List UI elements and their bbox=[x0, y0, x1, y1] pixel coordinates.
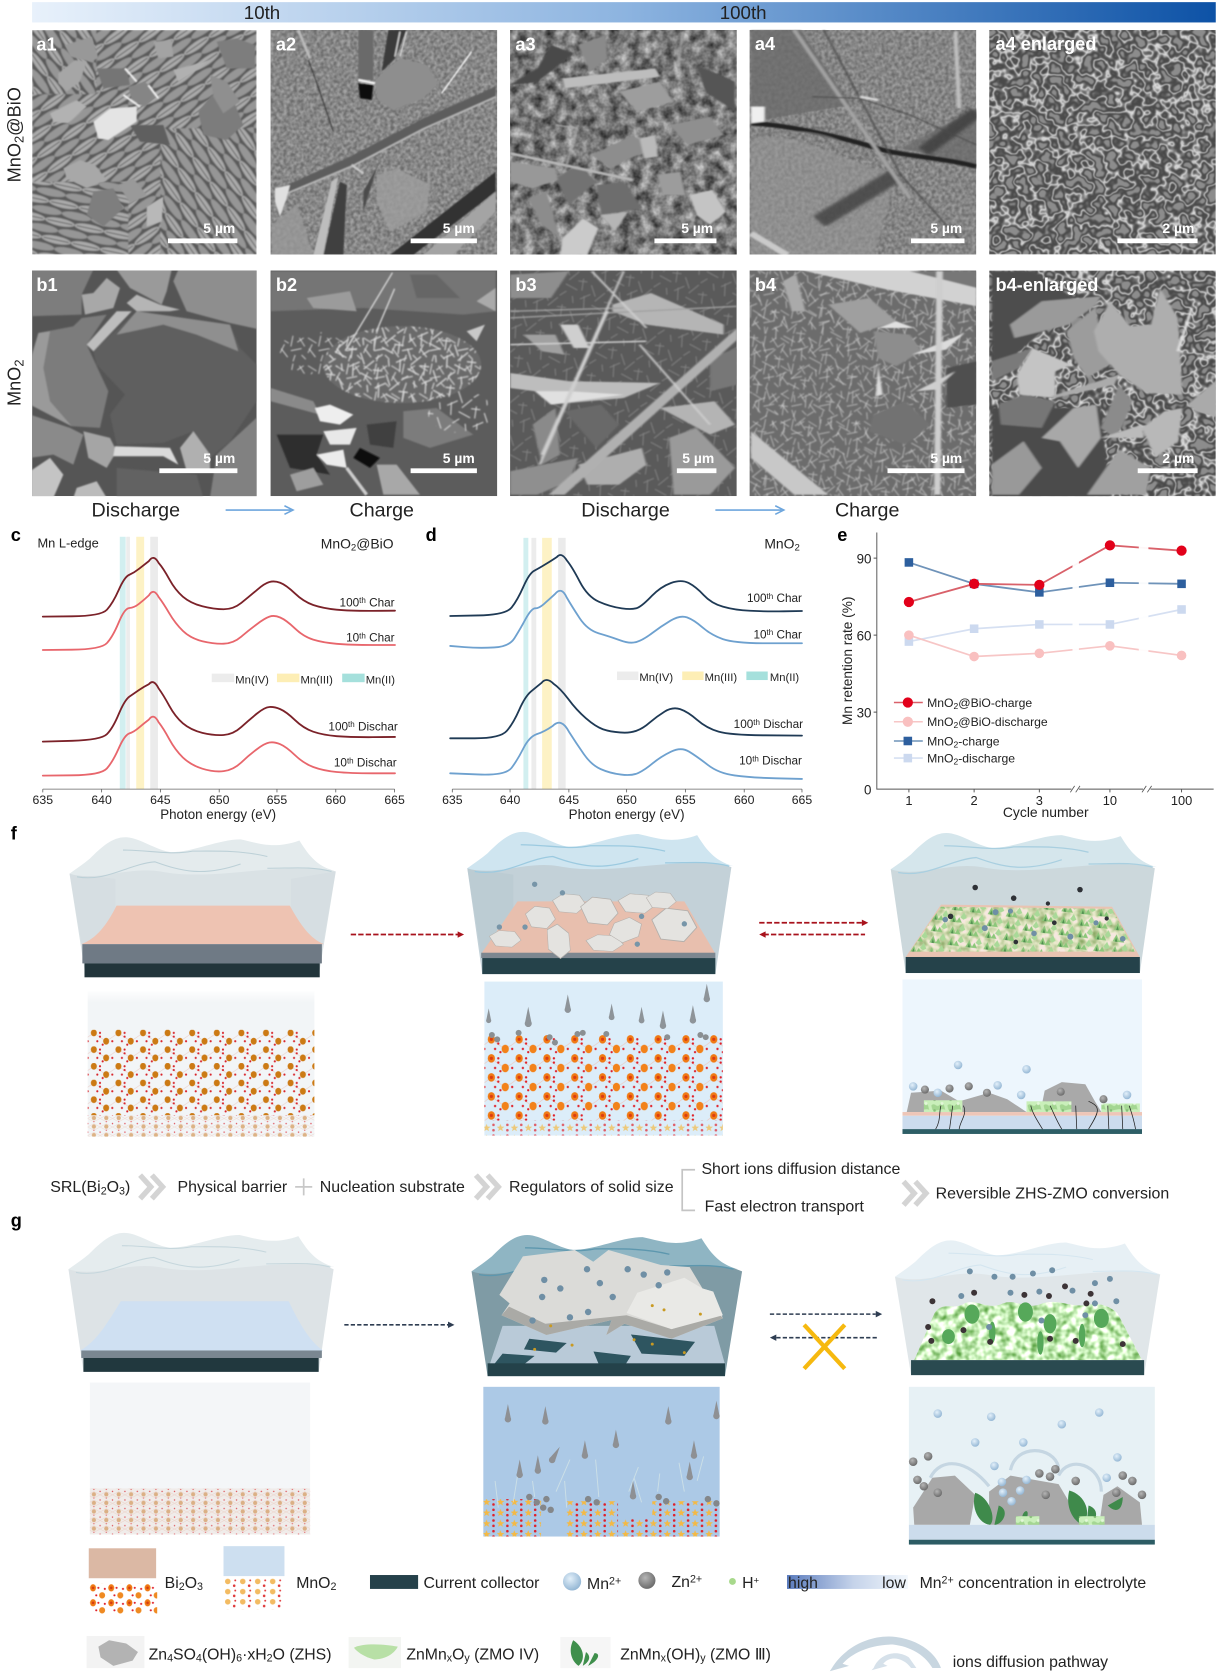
legend ZHS: O (ZHS) bbox=[273, 1646, 331, 1663]
curve labels d bbox=[734, 592, 803, 768]
legend Mn2+: Mn bbox=[587, 1576, 609, 1593]
caption: Charge 1: Charge bbox=[350, 499, 414, 521]
caption: Charge 2: Charge bbox=[835, 499, 899, 521]
x axis c: 660 bbox=[326, 793, 346, 807]
axes e: 30 bbox=[857, 705, 871, 720]
SEM panel b1 bbox=[30, 270, 260, 498]
scale bar a3: 5 µm bbox=[681, 220, 713, 236]
SEM panel a4 enlarged bbox=[989, 30, 1216, 254]
f1 cell: pristine Bi2O3 on current collector bbox=[70, 837, 336, 977]
x axis c: 650 bbox=[209, 793, 230, 807]
SEM panel b3 bbox=[510, 271, 737, 496]
x axis d: 635 bbox=[442, 793, 463, 807]
legend ZMO IV: x bbox=[447, 1653, 453, 1665]
panel letter c: c bbox=[11, 525, 21, 545]
curve labels d: 10 bbox=[739, 755, 752, 768]
panel letter g: g bbox=[11, 1210, 22, 1230]
x axis c bbox=[33, 789, 405, 822]
ions g3 bbox=[958, 1267, 1119, 1330]
legend ions diffusion pathway: ions diffusion pathway bbox=[953, 1654, 1108, 1671]
top cycle gradient bar bbox=[32, 2, 1216, 23]
legend c: Mn(II) bbox=[366, 674, 395, 686]
needle clusters b2 bbox=[278, 273, 492, 433]
curve 100th discharge d bbox=[450, 680, 802, 738]
legend ZMO III bbox=[560, 1637, 771, 1668]
arrow g1 to g2 bbox=[344, 1322, 454, 1328]
label a1: a1 bbox=[36, 34, 57, 54]
curve labels d: Char bbox=[773, 592, 802, 605]
label b3: b3 bbox=[515, 275, 537, 295]
text reversible: Reversible ZHS-ZMO conversion bbox=[936, 1186, 1169, 1203]
legend ZMO III: (ZMO Ⅲ) bbox=[706, 1646, 771, 1663]
legend ZHS: Zn bbox=[149, 1646, 167, 1663]
row label: MnO2@BiO: 2 bbox=[12, 136, 27, 143]
legend e: MnO bbox=[927, 751, 953, 765]
curve labels c: th bbox=[359, 596, 366, 605]
legend concentration gradient bbox=[787, 1575, 1146, 1592]
curve labels d: th bbox=[753, 718, 760, 727]
legend row 1 bbox=[89, 1546, 1146, 1614]
axes e: 3 bbox=[1036, 793, 1043, 808]
scale bar a2 bbox=[410, 224, 477, 244]
f3 section: ZHS and ZMO with diffusion bbox=[902, 979, 1142, 1134]
curve labels c bbox=[328, 596, 398, 770]
label a2: a2 bbox=[276, 34, 296, 54]
scale bar b4: 5 µm bbox=[930, 450, 962, 466]
row label: MnO2: 2 bbox=[12, 360, 27, 367]
legend ZMO IV bbox=[349, 1637, 539, 1668]
legend ZHS bbox=[87, 1636, 331, 1668]
axes e: 10 bbox=[1103, 793, 1117, 808]
legend e: MnO bbox=[927, 734, 953, 748]
legend d: Mn(II) bbox=[770, 672, 799, 684]
Zn clusters on surface bbox=[489, 1030, 709, 1046]
top cycle gradient bar: 10th bbox=[244, 2, 280, 23]
curve labels c: Char bbox=[366, 632, 395, 645]
curve labels d: 10 bbox=[753, 628, 767, 641]
H+ markers bbox=[533, 1304, 702, 1354]
curve labels c: 10 bbox=[334, 757, 347, 770]
legend concentration gradient: low bbox=[882, 1575, 906, 1592]
panel letter e: e bbox=[837, 525, 847, 545]
series MnO2@BiO-charge bbox=[904, 535, 1187, 663]
legend MnO2: MnO bbox=[296, 1575, 330, 1592]
text regulators: Regulators of solid size bbox=[509, 1179, 674, 1196]
x axis d: Photon energy (eV) bbox=[569, 807, 685, 822]
x axis d: 660 bbox=[734, 793, 755, 807]
row label: MnO2@BiO: @BiO bbox=[4, 87, 24, 136]
heading d: 2 bbox=[794, 543, 800, 554]
legend MnO2: 2 bbox=[330, 1581, 336, 1593]
label b2: b2 bbox=[276, 275, 297, 295]
curve 10th discharge d bbox=[450, 723, 802, 779]
x axis c: 640 bbox=[91, 793, 112, 807]
flow: mechanism summary bbox=[50, 1161, 1169, 1215]
oxidation-state bands d bbox=[523, 538, 566, 789]
legend ZHS: 2 bbox=[267, 1653, 273, 1665]
panel letter f: f bbox=[11, 823, 18, 843]
curve labels d: th bbox=[767, 628, 773, 637]
scale bar a4 bbox=[911, 224, 964, 244]
legend ZMO IV: y bbox=[464, 1653, 470, 1665]
heading c right: MnO bbox=[321, 536, 351, 552]
scale bar a4 enlarged bbox=[1117, 224, 1198, 244]
ZHS blocks bbox=[907, 1082, 1101, 1112]
curve labels d: Dischar bbox=[760, 718, 803, 731]
chevrons 3 bbox=[904, 1182, 926, 1205]
legend row 2 bbox=[87, 1636, 1108, 1671]
legend Bi2O3 bbox=[89, 1548, 203, 1614]
chart d: XANES MnO2 bbox=[426, 525, 812, 822]
curve 100th charge d bbox=[450, 555, 802, 616]
reversible arrows f2 f3 bbox=[759, 920, 868, 938]
curve labels d: Dischar bbox=[759, 755, 802, 768]
top cycle gradient bar: 100th bbox=[720, 2, 767, 23]
legend ZMO IV: (ZMO IV) bbox=[470, 1646, 539, 1663]
dark ions g3 bbox=[925, 1283, 1126, 1347]
x axis c: 645 bbox=[150, 793, 171, 807]
heading c right: @BiO bbox=[356, 536, 394, 552]
g2 lattice: dissolution bbox=[483, 1387, 720, 1537]
legend c: Mn(III) bbox=[300, 674, 333, 686]
curve 10th discharge bbox=[43, 717, 395, 776]
scale bar b2 bbox=[410, 454, 477, 474]
text SRL: ) bbox=[125, 1179, 130, 1196]
curve labels c: 100 bbox=[340, 596, 359, 609]
legend H+: H bbox=[742, 1575, 754, 1592]
legend d: Mn(IV) bbox=[639, 672, 673, 684]
oxidation-state bands c bbox=[120, 537, 158, 789]
scale bar a4 enlarged: 2 µm bbox=[1162, 220, 1194, 236]
text fast electron: Fast electron transport bbox=[705, 1198, 865, 1215]
scale bar a2: 5 µm bbox=[443, 220, 475, 236]
legend ZHS: SO bbox=[173, 1646, 196, 1663]
curve 100th charge bbox=[43, 558, 395, 617]
legend Mn2+ bbox=[563, 1572, 621, 1593]
legend Zn2+: Zn bbox=[672, 1574, 690, 1591]
x axis d: 645 bbox=[559, 793, 579, 807]
heading c right: 2 bbox=[351, 543, 356, 554]
x axis c: 635 bbox=[33, 793, 53, 807]
x axis d: 655 bbox=[675, 793, 696, 807]
ZMO islands bbox=[924, 1100, 1140, 1112]
diffusion arcs g3 bbox=[930, 1451, 1101, 1492]
scale bar b1: 5 µm bbox=[203, 450, 235, 466]
axes e bbox=[840, 532, 1214, 820]
caption: Discharge 2: Discharge bbox=[581, 499, 670, 521]
legend d bbox=[617, 671, 799, 684]
falling Zn g2 bbox=[505, 1401, 720, 1499]
blocked reverse arrow bbox=[770, 1325, 879, 1369]
x axis c: 655 bbox=[267, 793, 287, 807]
ion tails g2 bbox=[495, 1456, 704, 1508]
legend ZMO IV: O bbox=[452, 1646, 464, 1663]
curve labels c: th bbox=[348, 720, 355, 729]
g1 lattice: MnO2 atomic view bbox=[90, 1383, 310, 1534]
legend e: MnO bbox=[927, 715, 953, 729]
label a4 enlarged: a4 enlarged bbox=[996, 34, 1096, 54]
SEM panel b4 enlarged bbox=[989, 271, 1219, 498]
Mn2+ spheres f3 bbox=[909, 1061, 1131, 1099]
f3 cell: ZMO on Bi2O3 bbox=[891, 833, 1157, 973]
axes e: 2 bbox=[971, 793, 978, 808]
g3 section: thick ZHS blocks bbox=[909, 1387, 1155, 1545]
text SRL: SRL(Bi bbox=[50, 1179, 101, 1196]
legend e: 2 bbox=[953, 701, 958, 711]
curve labels c: Char bbox=[366, 596, 395, 609]
legend MnO2 bbox=[223, 1546, 336, 1609]
legend e: MnO bbox=[927, 696, 953, 710]
scale bar a3 bbox=[654, 224, 716, 244]
SEM panel b2 bbox=[271, 271, 497, 496]
arrow f1 to f2 bbox=[351, 931, 464, 938]
Mn spheres g3 bbox=[933, 1408, 1122, 1506]
curve labels d: 100 bbox=[734, 718, 753, 731]
SEM panel a3 bbox=[510, 30, 737, 255]
Zn clusters g2 bbox=[526, 1494, 720, 1513]
legend e: 2 bbox=[953, 757, 958, 767]
SEM panel a4 bbox=[750, 30, 977, 258]
series MnO2@BiO-discharge bbox=[904, 630, 1186, 661]
legend H+ bbox=[729, 1575, 760, 1592]
legend ZHS: 4 bbox=[167, 1653, 173, 1665]
chart e: Mn retention rate bbox=[837, 525, 1214, 820]
axes e: 0 bbox=[864, 782, 871, 797]
legend Zn2+ bbox=[638, 1572, 702, 1591]
text short diffusion: Short ions diffusion distance bbox=[701, 1161, 900, 1178]
legend concentration gradient: concentration in electrolyte bbox=[954, 1575, 1146, 1592]
curve 100th discharge bbox=[43, 682, 395, 742]
legend current collector bbox=[370, 1575, 539, 1592]
arrow: discharge to charge 1 bbox=[226, 506, 293, 514]
text SRL: O bbox=[107, 1179, 119, 1196]
scale bar b4 enlarged: 2 µm bbox=[1162, 450, 1194, 466]
series MnO2-charge bbox=[905, 558, 1186, 597]
legend e bbox=[894, 696, 1048, 767]
SEM panel a2 bbox=[271, 30, 497, 255]
x axis c: 665 bbox=[384, 793, 405, 807]
legend concentration gradient: Mn bbox=[920, 1575, 942, 1592]
curve labels c: th bbox=[359, 631, 366, 640]
label b4 enlarged: b4-enlarged bbox=[996, 275, 1098, 295]
scale bar b3: 5 µm bbox=[682, 450, 714, 466]
legend e: @BiO-charge bbox=[958, 696, 1032, 710]
SEM panel a1 bbox=[32, 30, 257, 254]
legend ZHS: ·xH bbox=[242, 1646, 267, 1663]
legend e: @BiO-discharge bbox=[958, 715, 1048, 729]
curve labels d: Char bbox=[773, 628, 802, 641]
legend Mn2+: 2+ bbox=[609, 1576, 621, 1588]
legend concentration gradient: high bbox=[788, 1575, 818, 1592]
scale bar a4: 5 µm bbox=[930, 220, 962, 236]
ions on flakes bbox=[529, 1266, 670, 1324]
curve labels d: th bbox=[752, 754, 759, 763]
caption: Discharge 1: Discharge bbox=[92, 499, 180, 521]
curve 10th charge d bbox=[450, 591, 802, 648]
f2 cell: MnO2 flakes deposited on Bi2O3 bbox=[467, 832, 734, 974]
label a3: a3 bbox=[515, 34, 536, 54]
axes e: 90 bbox=[857, 552, 871, 567]
f2 lattice: ion deposition bbox=[484, 982, 723, 1136]
legend Zn2+: 2+ bbox=[690, 1574, 702, 1586]
text physical barrier: Physical barrier bbox=[178, 1179, 288, 1196]
curve 10th charge bbox=[43, 592, 395, 650]
legend ZMO III: x bbox=[661, 1653, 667, 1665]
text nucleation substrate: Nucleation substrate bbox=[320, 1179, 465, 1196]
legend Bi2O3: 2 bbox=[179, 1581, 185, 1593]
g2 cell: large ZHS flakes on MnO2 bbox=[472, 1235, 742, 1376]
legend ZMO III: ZnMn bbox=[620, 1646, 661, 1663]
scale bar a1 bbox=[168, 224, 238, 244]
curve labels d: 100 bbox=[747, 592, 767, 605]
curve labels c: Dischar bbox=[355, 720, 398, 733]
legend ZHS: 4 bbox=[196, 1653, 202, 1665]
Zn2+ spheres f3 bbox=[921, 1082, 1108, 1103]
axes e: 60 bbox=[857, 628, 871, 643]
ions in f2 bbox=[497, 882, 687, 947]
text SRL: 2 bbox=[101, 1185, 107, 1197]
electron wires bbox=[936, 1101, 1136, 1129]
legend current collector: Current collector bbox=[423, 1575, 539, 1592]
heading d: MnO bbox=[764, 536, 794, 552]
SEM panel b4 bbox=[750, 268, 977, 496]
label a4: a4 bbox=[755, 34, 775, 54]
label b1: b1 bbox=[36, 275, 58, 295]
chart c: XANES MnO2@BiO bbox=[11, 525, 405, 822]
curve labels d: th bbox=[767, 592, 773, 601]
ZMO fragments g3 bbox=[1016, 1516, 1105, 1525]
x axis d: 665 bbox=[792, 793, 812, 807]
scale bar b4 bbox=[888, 450, 964, 473]
chevrons 1 bbox=[140, 1175, 163, 1199]
legend Bi2O3: 3 bbox=[197, 1581, 203, 1593]
green leaves bbox=[942, 1302, 1109, 1355]
legend c bbox=[212, 674, 395, 686]
x axis d: 640 bbox=[500, 793, 520, 807]
axes e: 1 bbox=[905, 793, 912, 808]
legend ZHS: (OH) bbox=[202, 1646, 236, 1663]
forward arrow g2 to g3 bbox=[770, 1311, 882, 1317]
axes e: Mn retention rate (%) bbox=[840, 597, 855, 725]
curve labels c: th bbox=[347, 756, 354, 765]
ZHS polygons g3 bbox=[913, 1476, 1142, 1525]
scale bar b4 enlarged bbox=[1138, 454, 1198, 474]
scale bar b3 bbox=[676, 454, 716, 474]
g3 cell: ZMO foam bbox=[895, 1240, 1161, 1375]
legend concentration gradient: 2+ bbox=[942, 1575, 954, 1587]
legend ZMO IV: ZnMn bbox=[406, 1646, 447, 1663]
legend Bi2O3: O bbox=[185, 1575, 197, 1592]
plus sign bbox=[295, 1178, 312, 1195]
dissolved ions f3 bbox=[948, 885, 1109, 944]
Mn ions f3 bbox=[942, 908, 1126, 942]
label b4: b4 bbox=[755, 275, 776, 295]
green leaves g3 bbox=[974, 1491, 1123, 1525]
legend e: -discharge bbox=[958, 751, 1015, 765]
x axis c: Photon energy (eV) bbox=[160, 807, 276, 822]
scale bar b1 bbox=[159, 454, 238, 474]
g1 cell: pristine MnO2 bbox=[68, 1233, 335, 1372]
legend c: Mn(IV) bbox=[235, 674, 269, 686]
chevrons 2 bbox=[476, 1175, 498, 1199]
curve labels c: 10 bbox=[346, 632, 359, 645]
legend e: -charge bbox=[958, 734, 1000, 748]
curve labels c: 100 bbox=[328, 720, 348, 733]
falling Zn ions bbox=[486, 984, 710, 1029]
bracket bbox=[682, 1170, 695, 1210]
f1 lattice: Bi2O3 atomic view bbox=[86, 989, 317, 1139]
legend ions diffusion pathway bbox=[830, 1637, 1108, 1671]
heading c left: Mn L-edge bbox=[37, 535, 99, 550]
arrow: discharge to charge 2 bbox=[715, 506, 784, 514]
legend ZHS: 6 bbox=[236, 1653, 242, 1665]
panel letter d: d bbox=[426, 525, 437, 545]
curve labels c: Dischar bbox=[354, 757, 397, 770]
row label: MnO2: MnO bbox=[4, 367, 24, 406]
legend Bi2O3: Bi bbox=[165, 1575, 179, 1592]
x axis d: 650 bbox=[616, 793, 637, 807]
row label: MnO2@BiO: MnO bbox=[4, 143, 24, 182]
legend e: 2 bbox=[953, 720, 958, 730]
text SRL: 3 bbox=[119, 1185, 125, 1197]
legend e: 2 bbox=[953, 739, 958, 749]
Zn spheres g3 bbox=[909, 1452, 1146, 1499]
axes e: Cycle number bbox=[1003, 804, 1089, 820]
white MnO2 flakes bbox=[489, 892, 697, 963]
series MnO2-discharge bbox=[905, 605, 1186, 646]
axes e: 100 bbox=[1171, 793, 1192, 808]
scale bar a1: 5 µm bbox=[203, 220, 235, 236]
scale bar b2: 5 µm bbox=[443, 450, 475, 466]
legend d: Mn(III) bbox=[705, 672, 737, 684]
legend ZMO III: y bbox=[700, 1653, 706, 1665]
legend H+: + bbox=[754, 1576, 760, 1587]
x axis d bbox=[442, 789, 812, 822]
legend ZMO III: (OH) bbox=[666, 1646, 700, 1663]
